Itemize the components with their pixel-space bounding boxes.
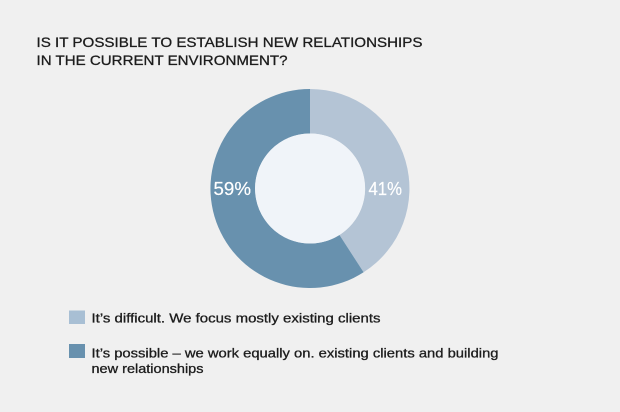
- title: IS IT POSSIBLE TO ESTABLISH NEW RELATIONSHIPS: [36, 34, 423, 50]
- legend item: difficult: It’s difficult. We focus mostly existing clients: [92, 310, 381, 326]
- title: IN THE CURRENT ENVIRONMENT?: [36, 52, 288, 68]
- donut chart: [210, 89, 409, 288]
- legend item: possible: It’s possible – we work equally on. existing clients and building: [92, 346, 498, 360]
- donut centre: [255, 134, 365, 244]
- value label: 41%: 41%: [368, 179, 402, 199]
- segment: possible 59%: [210, 89, 364, 288]
- legend item: possible: [69, 344, 498, 376]
- segment: difficult 41%: [310, 89, 409, 272]
- value label: 59%: 59%: [214, 179, 251, 199]
- title: [36, 34, 423, 68]
- legend item: possible: new relationships: [92, 361, 204, 376]
